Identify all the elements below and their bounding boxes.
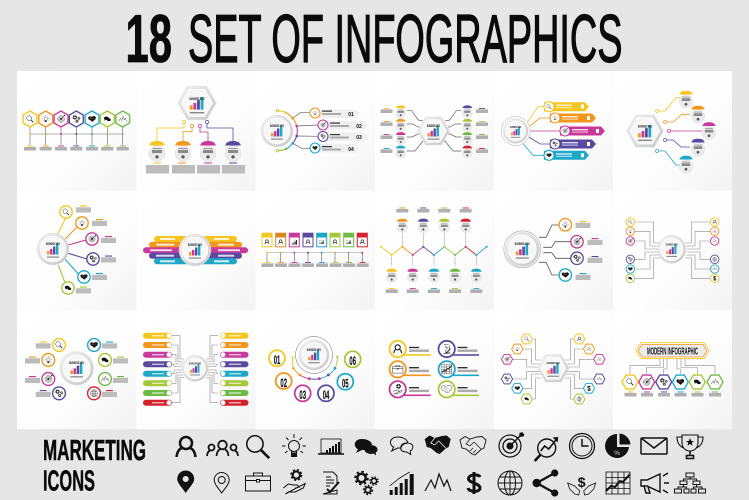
panel: arc with numbered tabs [255, 71, 375, 190]
dotted arc [292, 356, 338, 380]
right rings [710, 218, 719, 282]
card icons [265, 240, 364, 245]
centre badge: BUSINESS INFO [270, 124, 284, 128]
pill end caps [152, 333, 241, 405]
left pills [143, 333, 172, 406]
heading: marketing icons: ICONS [43, 466, 95, 498]
centre badge: BUSINESS INFO [666, 242, 678, 246]
centre badge: BUSINESS INFO [307, 348, 321, 352]
centre badge: BUSINESS INFO [46, 242, 60, 246]
stacked bars [143, 236, 248, 264]
icon rings [390, 341, 455, 398]
panel: numbered circles [255, 310, 375, 429]
panel: circle with arrow bars [494, 71, 613, 190]
text blocks [146, 162, 245, 174]
tab text and numbers: 03 [356, 135, 362, 141]
text blocks [576, 221, 602, 280]
centre badge: BUSINESS INFO [69, 361, 84, 365]
left hexagons [501, 334, 532, 404]
capped nodes [396, 105, 472, 158]
heading: marketing icons [43, 435, 146, 498]
numbered rings: 05 [342, 376, 349, 390]
arrow bars [544, 102, 605, 160]
panel: large circle with four rings [494, 190, 613, 310]
centre hexagon: BUSINESS INFO [638, 124, 652, 128]
bar text [150, 238, 240, 262]
left rings [626, 218, 634, 282]
icon row 2 [177, 469, 705, 497]
icon row 1 [176, 432, 703, 461]
centre badge: BUSINESS INFO [189, 362, 201, 366]
numbered rings: 03 [299, 388, 306, 402]
node rings [310, 108, 328, 153]
panel: circle with eight rings [17, 310, 136, 429]
panel: hexagon network [494, 310, 613, 429]
centre badge: BUSINESS INFO [515, 242, 530, 246]
icon row 1: % [614, 450, 620, 457]
item text [409, 347, 478, 392]
centre hexagon: BUSINESS INFO [427, 124, 440, 128]
heading: marketing icons: MARKETING [43, 435, 146, 467]
icon row 2: $ [578, 474, 586, 490]
numbered tabs [318, 110, 368, 152]
bar text and icons [544, 102, 599, 160]
tab text and numbers: 01 [348, 112, 354, 118]
hexagons [622, 375, 723, 389]
numbered rings: 01 [274, 353, 280, 367]
title [126, 1, 622, 77]
tab text and numbers [322, 110, 362, 153]
numbered rings: 04 [323, 388, 329, 402]
node rings [60, 206, 99, 294]
capped nodes [679, 91, 716, 173]
centre badge: BUSINESS INFO [510, 125, 522, 129]
panel: radial circle with six spokes [17, 190, 136, 310]
upper capped nodes [396, 208, 472, 233]
node rings [559, 218, 583, 281]
tab text and numbers: 02 [356, 124, 362, 130]
panel: hexagon with capped nodes [613, 71, 732, 190]
node rings [42, 339, 111, 400]
text blocks [380, 108, 488, 153]
panel: eight card timeline [255, 190, 375, 310]
text blocks [25, 342, 128, 397]
labels [624, 392, 721, 396]
panel: hexagon with two columns [375, 71, 494, 190]
numbered rings [269, 350, 361, 402]
right hexagons [574, 334, 605, 404]
colored arc [277, 111, 297, 151]
title: 18 [126, 1, 172, 77]
panel: circle with pill bars [136, 310, 255, 429]
lower capped nodes [386, 269, 482, 293]
timeline dots and labels [24, 133, 129, 150]
panel: six icon list [375, 310, 494, 429]
right pills [220, 333, 248, 406]
centre hexagon: BUSINESS INFO [547, 361, 560, 365]
hexagon steps [23, 111, 130, 127]
panel: hexagon tree [136, 71, 255, 190]
cards [262, 233, 368, 247]
four capped nodes [149, 141, 241, 162]
dots and labels [262, 252, 368, 267]
numbered rings: 06 [349, 354, 356, 368]
zigzag line [381, 247, 487, 255]
numbered rings: 02 [280, 376, 287, 390]
panel: circle with twelve rings [613, 190, 732, 310]
text blocks [76, 206, 116, 294]
centre hexagon: BUSINESS INFO [190, 97, 205, 101]
panel: modern infographic banner tree [613, 310, 732, 429]
panel: zigzag timeline [375, 190, 494, 310]
underline bars [400, 354, 479, 396]
panel: hexagon timeline [17, 71, 136, 190]
panel: circle with stacked bars [136, 190, 255, 310]
tab text and numbers: 04 [348, 147, 354, 153]
centre badge: BUSINESS INFO [188, 243, 202, 247]
